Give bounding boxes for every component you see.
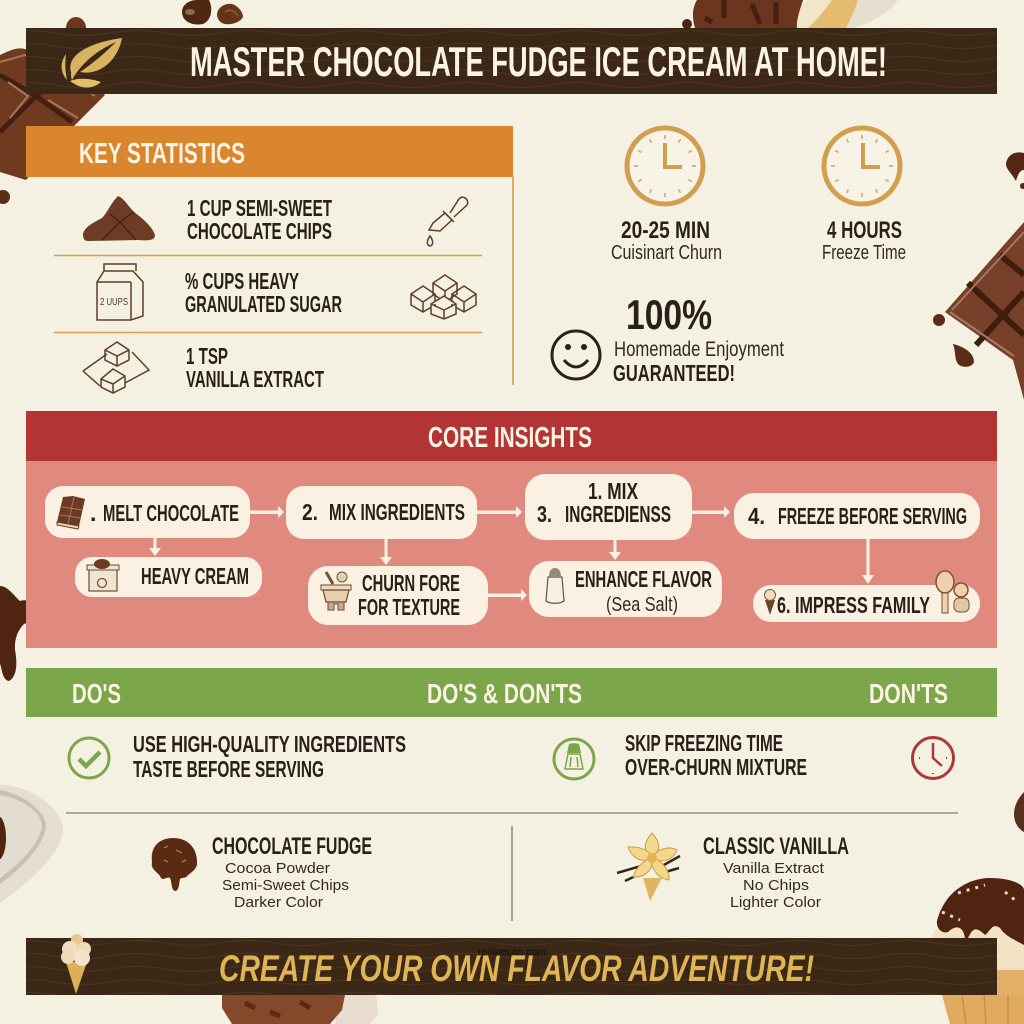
- step: mix ingredienss: INGREDIENSS: [565, 501, 671, 527]
- stat: enjoyment: Homemade Enjoyment: [614, 338, 784, 361]
- decoration: drips right: [1006, 152, 1024, 189]
- stat 3 text: 1 TSP: [186, 343, 228, 369]
- step: enhance flavor: ENHANCE FLAVOR: [575, 566, 712, 592]
- step: impress family: 6. IMPRESS FAMILY: [777, 592, 930, 618]
- icon: fudge scoop: [152, 838, 197, 891]
- stat 2 text: % CUPS HEAVY: [185, 268, 299, 294]
- icon: family: [936, 571, 969, 613]
- icon: check: [69, 738, 109, 778]
- vanilla list: Lighter Color: [730, 894, 821, 911]
- title banner: [26, 28, 997, 94]
- step: mix ingredients: [286, 486, 477, 539]
- icon: clock: [824, 128, 900, 204]
- icon: vanilla flower: [617, 833, 680, 901]
- dos and donts header: [26, 668, 997, 717]
- fudge list: Semi-Sweet Chips: [222, 877, 349, 894]
- stat: enjoyment: [552, 291, 784, 386]
- icon: red clock: [912, 738, 954, 778]
- icon: cream jar: [87, 559, 119, 591]
- decoration: ice cream top right: [682, 0, 898, 29]
- step: melt chocolate: .: [90, 500, 96, 526]
- panel: core insights: [26, 411, 997, 648]
- stat: enjoyment: GUARANTEED!: [613, 360, 735, 386]
- decoration: chocolate bar top left: [0, 17, 105, 204]
- stat: freeze time: [822, 128, 906, 264]
- stat: churn time: 20-25 MIN: [621, 217, 710, 244]
- stat 3 text: [186, 343, 324, 392]
- stat 1 text: [187, 195, 332, 244]
- carton label: 2 UUPS: [100, 297, 128, 308]
- vanilla list: No Chips: [743, 877, 809, 894]
- step: mix ingredients: 2.: [302, 499, 318, 525]
- icon: salt in circle: [554, 739, 594, 779]
- core insights header: [26, 411, 997, 462]
- icon: salt shaker: [546, 568, 564, 603]
- step: melt chocolate: MELT CHOCOLATE: [103, 500, 239, 526]
- decoration: cupcake bottom right: [930, 878, 1024, 1024]
- step: mix ingredienss: 3.: [537, 501, 552, 527]
- step: heavy cream: HEAVY CREAM: [141, 563, 249, 589]
- decoration: cookie bottom: [222, 990, 378, 1024]
- dos text: TASTE BEFORE SERVING: [133, 756, 324, 782]
- comparison: classic vanilla: [617, 833, 849, 911]
- icon: chocolate chip pile: [83, 196, 155, 241]
- key statistics header: [26, 126, 513, 177]
- watermark: recipecan.com: [478, 947, 546, 958]
- decoration: chocolate chips top: [182, 0, 243, 24]
- step: melt chocolate: [45, 486, 250, 538]
- icon: sugar cubes on pile: [83, 342, 149, 393]
- stat: enjoyment: 100%: [626, 291, 712, 338]
- fudge list: [222, 860, 349, 911]
- step: enhance flavor: [529, 561, 722, 617]
- donts text: OVER-CHURN MIXTURE: [625, 754, 807, 780]
- icon: small cone: [764, 590, 776, 615]
- icon: gold leaf: [62, 38, 122, 88]
- step: mix ingredients: MIX INGREDIENTS: [329, 499, 465, 525]
- icon: churn: [321, 572, 351, 610]
- stat: churn time: [611, 128, 722, 264]
- dos heading: DO'S: [72, 678, 121, 709]
- decoration: bowl left: [0, 785, 63, 903]
- stat: churn time: Cuisinart Churn: [611, 242, 722, 264]
- comparison: chocolate fudge: [152, 833, 372, 911]
- vanilla heading: CLASSIC VANILLA: [703, 833, 849, 860]
- donts heading: DON'TS: [869, 678, 948, 709]
- dos text: [133, 731, 406, 782]
- donts text: SKIP FREEZING TIME: [625, 730, 783, 756]
- stat 2 text: GRANULATED SUGAR: [185, 291, 342, 317]
- core insights body: [26, 461, 997, 648]
- step: freeze: [734, 493, 980, 539]
- step: churn: FOR TEXTURE: [358, 594, 460, 620]
- step: freeze: 4.: [748, 503, 765, 529]
- donts text: [625, 730, 807, 780]
- panel: key statistics: [26, 126, 513, 393]
- step: churn: CHURN FORE: [362, 570, 460, 596]
- decoration: chocolate drip left: [0, 586, 38, 681]
- panel: dos and donts: [26, 668, 997, 782]
- decoration: right chip: [1014, 792, 1024, 832]
- section heading: DO'S & DON'TS: [427, 678, 582, 709]
- step: mix ingredienss: [525, 474, 692, 540]
- step: churn: [308, 566, 488, 625]
- dividers: [66, 813, 958, 921]
- fudge list: Darker Color: [234, 894, 323, 911]
- icon: clock: [627, 128, 703, 204]
- step: mix ingredienss: 1. MIX: [588, 478, 638, 504]
- dos text: USE HIGH-QUALITY INGREDIENTS: [133, 731, 406, 757]
- icon: ice cream cone: [61, 934, 91, 994]
- arrows between steps: [149, 506, 874, 601]
- icon: chocolate bar: [57, 496, 85, 529]
- stat 1 text: CHOCOLATE CHIPS: [187, 218, 332, 244]
- vanilla list: [723, 860, 825, 911]
- fudge list: Cocoa Powder: [225, 860, 330, 877]
- step: impress family: [753, 571, 980, 622]
- stat 1 text: 1 CUP SEMI-SWEET: [187, 195, 332, 221]
- footer text: CREATE YOUR OWN FLAVOR ADVENTURE!: [219, 948, 814, 989]
- icon: dropper: [427, 197, 468, 246]
- stat 3 text: VANILLA EXTRACT: [186, 366, 324, 392]
- icon: smiley: [552, 331, 600, 379]
- step: enhance flavor: (Sea Salt): [606, 594, 678, 616]
- decoration: chocolate bar right: [933, 222, 1024, 400]
- icon: milk carton: [97, 264, 143, 320]
- stat: freeze time: Freeze Time: [822, 242, 906, 264]
- step: heavy cream: [75, 557, 262, 597]
- core insights heading: CORE INSIGHTS: [428, 422, 592, 454]
- key statistics heading: KEY STATISTICS: [79, 138, 245, 170]
- stat 2 text: [185, 268, 342, 317]
- footer banner: [26, 934, 997, 995]
- icon: sugar cubes: [411, 275, 476, 319]
- vanilla list: Vanilla Extract: [723, 860, 825, 877]
- stat: freeze time: 4 HOURS: [827, 217, 902, 244]
- fudge heading: CHOCOLATE FUDGE: [212, 833, 372, 860]
